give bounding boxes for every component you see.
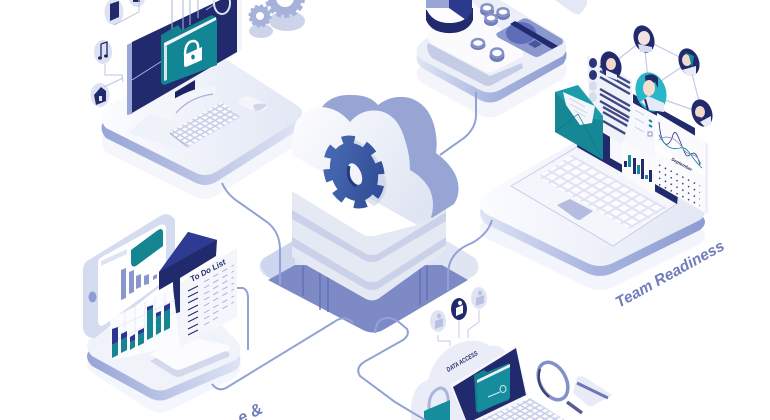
mouse <box>238 96 268 112</box>
line chart <box>657 113 704 172</box>
panel: list <box>587 55 632 150</box>
laptop base <box>511 147 678 246</box>
panel: top centre finance <box>416 0 587 118</box>
wires <box>212 92 492 420</box>
calendar: September <box>671 157 693 172</box>
cloud <box>292 95 459 237</box>
icon: magnifier and card <box>532 357 612 413</box>
platform: reports <box>87 290 240 412</box>
platform: desktop <box>102 53 302 199</box>
pie chart <box>426 0 473 33</box>
icon: gear <box>318 132 390 212</box>
laptop screen <box>577 100 678 204</box>
credit card <box>496 18 563 57</box>
avatars <box>597 22 716 130</box>
network lines <box>611 39 702 113</box>
tablet <box>83 214 175 338</box>
cloud: data access <box>411 341 520 420</box>
icon: folder with lock <box>161 15 217 85</box>
panel: bottom-left reports <box>83 214 266 420</box>
keyboard <box>170 102 240 148</box>
to do list <box>180 248 237 348</box>
slab <box>150 336 230 377</box>
stacked bar chart <box>110 288 180 360</box>
coins <box>470 4 510 62</box>
panel: centre cloud pit <box>260 95 478 332</box>
laptop: data access <box>450 346 565 420</box>
small card <box>555 0 587 14</box>
stacked layers <box>292 190 446 300</box>
platform: laptop <box>480 143 705 290</box>
monitor <box>127 0 242 118</box>
navy folder shape <box>159 232 217 314</box>
platform: finance <box>416 0 566 118</box>
panel: navy header and form <box>623 94 695 160</box>
calendar <box>655 142 708 214</box>
icon: gears <box>249 0 305 38</box>
bar chart: laptop <box>622 140 655 196</box>
cloud: data access: DATA ACCESS <box>446 350 480 374</box>
icons: small circles <box>90 0 145 107</box>
to do list: To Do List <box>189 257 228 284</box>
padlock <box>424 388 450 420</box>
label: Team Readiness: Team Readiness <box>613 237 728 311</box>
panel: bottom data access <box>411 287 612 420</box>
envelope <box>555 85 603 160</box>
panel: team readiness laptop <box>480 22 728 311</box>
pit base <box>260 195 478 332</box>
panel: top-left desktop <box>90 0 305 199</box>
access icons <box>430 287 487 346</box>
